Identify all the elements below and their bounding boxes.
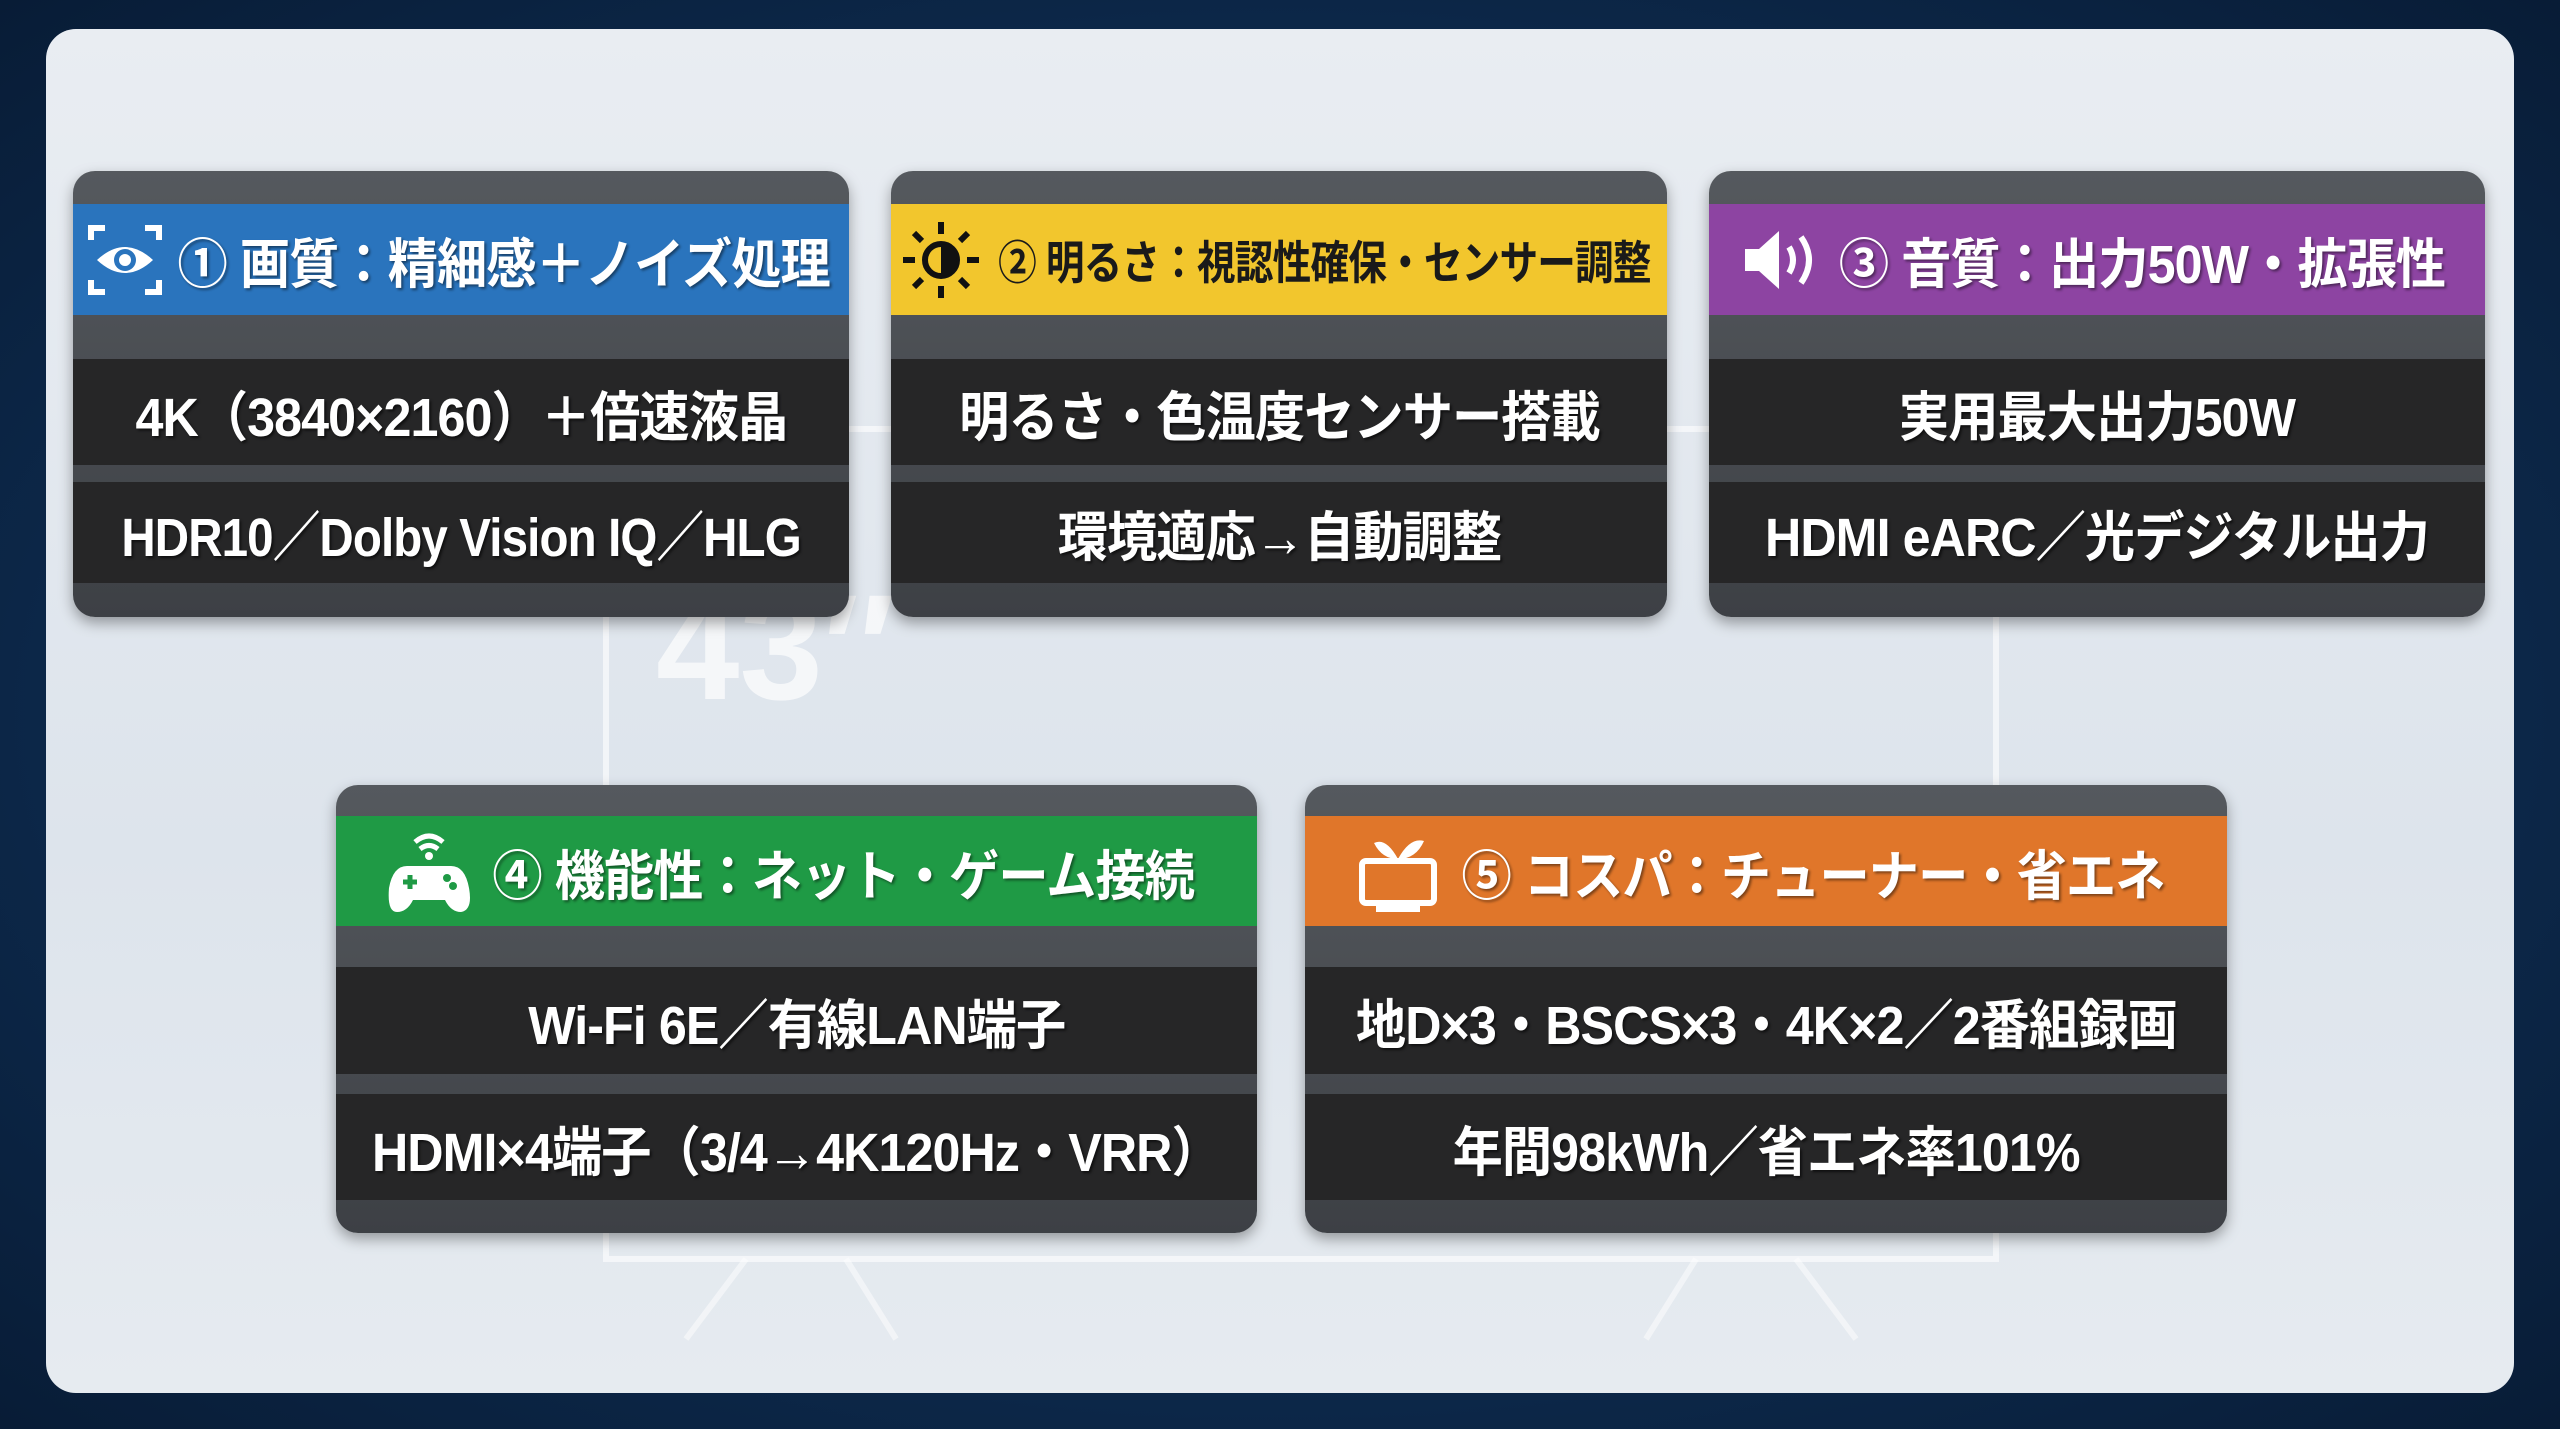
row 1-2 bbox=[73, 482, 849, 583]
faint TV outline: 43″ bbox=[656, 563, 895, 731]
row 5-1 bbox=[1305, 967, 2227, 1074]
card 4: functions bbox=[336, 785, 1257, 1233]
header 2 bbox=[891, 204, 1667, 315]
row 3-1: 実用最大出力50W bbox=[1899, 388, 2295, 448]
row 2-1: 明るさ・色温度センサー搭載 bbox=[959, 388, 1599, 448]
header 1: ① 画質：精細感＋ノイズ処理 bbox=[178, 235, 830, 295]
card 1: picture quality bbox=[73, 171, 849, 617]
row 5-1: 地D×3・BSCS×3・4K×2／2番組録画 bbox=[1355, 996, 2176, 1056]
row 4-2 bbox=[336, 1094, 1257, 1200]
row 1-2: HDR10／Dolby Vision IQ／HLG bbox=[121, 508, 801, 568]
row 1-1 bbox=[73, 359, 849, 465]
row 3-1 bbox=[1709, 359, 2485, 465]
row 3-2 bbox=[1709, 482, 2485, 583]
row 2-2: 環境適応→自動調整 bbox=[1057, 508, 1501, 568]
header 2: ② 明るさ：視認性確保・センサー調整 bbox=[998, 236, 1650, 288]
header 5: ⑤ コスパ：チューナー・省エネ bbox=[1461, 846, 2165, 906]
card 5: cost performance bbox=[1305, 785, 2227, 1233]
row 5-2: 年間98kWh／省エネ率101% bbox=[1453, 1122, 2079, 1182]
row 2-1 bbox=[891, 359, 1667, 465]
row 4-1 bbox=[336, 967, 1257, 1074]
header 4 bbox=[336, 816, 1257, 926]
row 2-2 bbox=[891, 482, 1667, 583]
card 2: brightness bbox=[891, 171, 1667, 617]
row 3-2: HDMI eARC／光デジタル出力 bbox=[1765, 508, 2429, 568]
header 5 bbox=[1305, 816, 2227, 926]
row 5-2 bbox=[1305, 1094, 2227, 1200]
row 4-1: Wi-Fi 6E／有線LAN端子 bbox=[528, 996, 1065, 1056]
header 3: ③ 音質：出力50W・拡張性 bbox=[1839, 235, 2445, 295]
header 3 bbox=[1709, 204, 2485, 315]
row 4-2: HDMI×4端子（3/4→4K120Hz・VRR） bbox=[372, 1122, 1221, 1182]
header 1 bbox=[73, 204, 849, 315]
header 4: ④ 機能性：ネット・ゲーム接続 bbox=[493, 846, 1194, 906]
row 1-1: 4K（3840×2160）＋倍速液晶 bbox=[135, 388, 787, 448]
card 3: sound bbox=[1709, 171, 2485, 617]
